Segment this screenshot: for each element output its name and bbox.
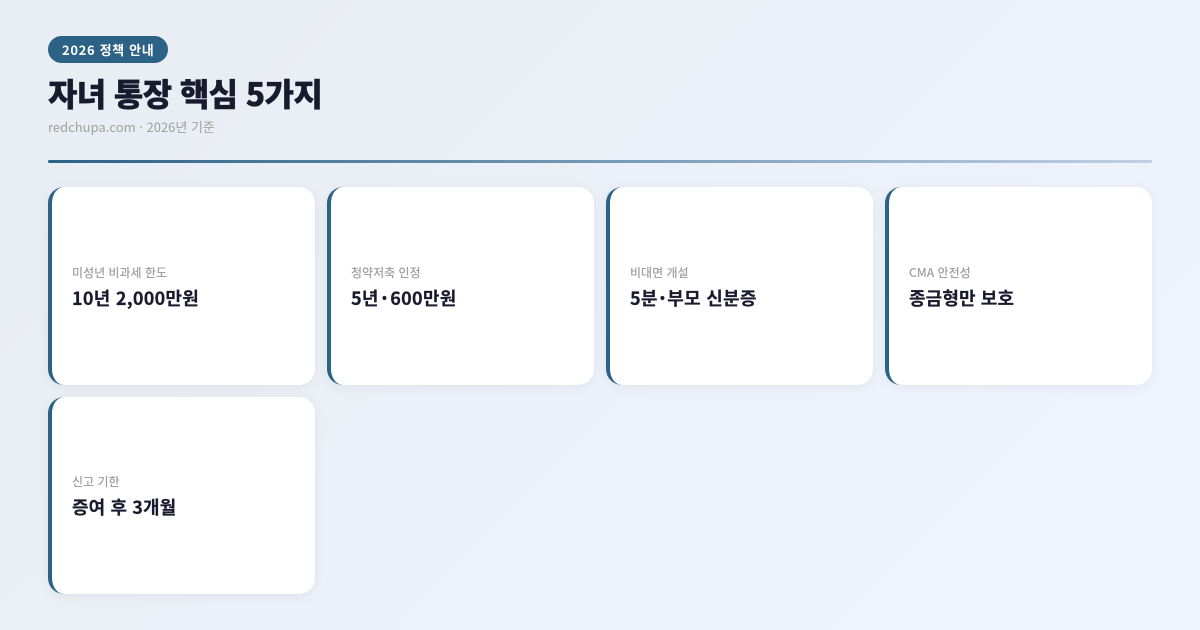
label: CMA safety: CMA 안전성 bbox=[909, 264, 971, 280]
badge bbox=[48, 36, 168, 63]
panel: card 3 bbox=[606, 187, 873, 385]
value: subscription savings: 5년·600만원 bbox=[351, 284, 457, 310]
value: tax-free limit: 10년 2,000만원 bbox=[72, 284, 199, 310]
panel: card 1 bbox=[48, 187, 315, 385]
label: subscription savings: 청약저축 인정 bbox=[351, 264, 421, 280]
title: 자녀 통장 핵심 5가지 bbox=[48, 70, 322, 116]
panel: card 4 bbox=[885, 187, 1152, 385]
value: CMA safety: 종금형만 보호 bbox=[909, 284, 1014, 310]
label: filing deadline: 신고 기한 bbox=[72, 473, 120, 490]
subtitle: redchupa.com · 2026년 기준 bbox=[48, 117, 215, 136]
label: tax-free limit: 미성년 비과세 한도 bbox=[72, 264, 167, 280]
label: online opening: 비대면 개설 bbox=[630, 264, 689, 280]
value: filing deadline: 증여 후 3개월 bbox=[72, 494, 176, 520]
panel: card 5 bbox=[48, 397, 315, 594]
value: online opening: 5분·부모 신분증 bbox=[630, 284, 757, 310]
panel: card 2 bbox=[327, 187, 594, 385]
badge: 2026 정책 안내 bbox=[62, 40, 154, 59]
divider bbox=[48, 160, 1152, 163]
